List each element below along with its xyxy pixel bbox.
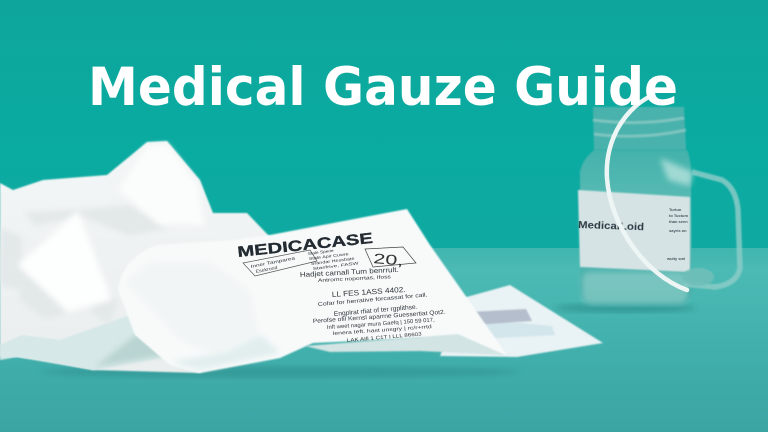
crumpled gauze mass: [0, 141, 280, 373]
background wall: [0, 0, 768, 250]
gauze shadow: [40, 366, 520, 378]
jar label small text: sayris on: [669, 228, 687, 233]
packet fine print: Inner Tamparea: [250, 255, 296, 269]
jar label small text: to Tuctum: [669, 213, 688, 218]
packet under shadow: [305, 334, 505, 355]
jar neck: [593, 107, 686, 150]
packet fine print: LL FES 1ASS 4402.: [332, 285, 406, 299]
packet lower blue tint: [170, 335, 280, 370]
brand name: MEDICACASE: [237, 230, 374, 261]
packet fine print: [250, 248, 446, 344]
packet fine print: Inft weet nagar mura Gaefq | 150 59 017,: [327, 317, 435, 331]
gauze fold under darker: [95, 330, 165, 367]
gauze bright facet: [18, 211, 112, 312]
table surface: [0, 248, 768, 432]
white tube: [607, 98, 687, 290]
packet body: [118, 209, 507, 373]
packet crease: [125, 262, 260, 355]
packet fine print: Stasfrive, FASW: [313, 260, 359, 271]
jar label small text: Turtun: [669, 207, 682, 212]
size box: 20,: [373, 250, 404, 269]
packet fine print: LAK AIll 1 C1T I LLL 86603: [347, 331, 422, 344]
jar shoulder highlight: [660, 158, 693, 186]
jar lower highlight: [582, 272, 688, 304]
size box: [365, 247, 416, 269]
torn wrapper strip behind packet: [440, 285, 603, 357]
jar label: [578, 190, 690, 272]
gauze top bright facet: [118, 144, 205, 225]
gauze shaded lower fold: [0, 315, 166, 370]
jar: [555, 98, 740, 313]
jar label small text: than seen: [669, 219, 688, 224]
jar handle: [684, 172, 740, 287]
jar label small text: wulty sml: [666, 256, 685, 261]
gauze soft fold shadows: [0, 205, 168, 325]
packet fine print: Antromc noporrtas, Ifoss: [318, 274, 392, 284]
jar shadow: [555, 303, 695, 313]
packet fine print: Esekrood: [255, 265, 278, 274]
jar label small text: [666, 207, 688, 261]
wrapper grey mark: [470, 309, 532, 325]
jar handle base blob: [682, 268, 714, 286]
packet fine print: Hadjet carnall Tum benrrult.: [300, 267, 399, 279]
packet fine print: Srandar Hessbate: [311, 256, 356, 266]
jar body: [580, 150, 692, 307]
jar neck threads: [593, 118, 686, 136]
gauze: [0, 141, 520, 378]
title: Medical Gauze Guide: [88, 57, 678, 118]
packet fine print: Stale Sperie: [308, 248, 335, 256]
packet small box: [243, 250, 317, 276]
packet fine print: Cofar for herrative forcassat for call.: [318, 292, 428, 308]
wrapper panel: [470, 318, 555, 339]
packet fine print: lenera teft. hast unsgry | rc/r+rrtd: [333, 324, 432, 337]
packet fine print: Stale Apir Cuwre: [309, 251, 350, 261]
packet fine print: Perofse ofil Kernsl aparrne Guessertiat Qot2.: [313, 310, 446, 325]
jar label text: MedicalLoid: [578, 220, 644, 233]
packet fine print: Engplrat rfiat of ter rgplithse.: [334, 304, 418, 318]
medicacase packet: [118, 209, 507, 373]
